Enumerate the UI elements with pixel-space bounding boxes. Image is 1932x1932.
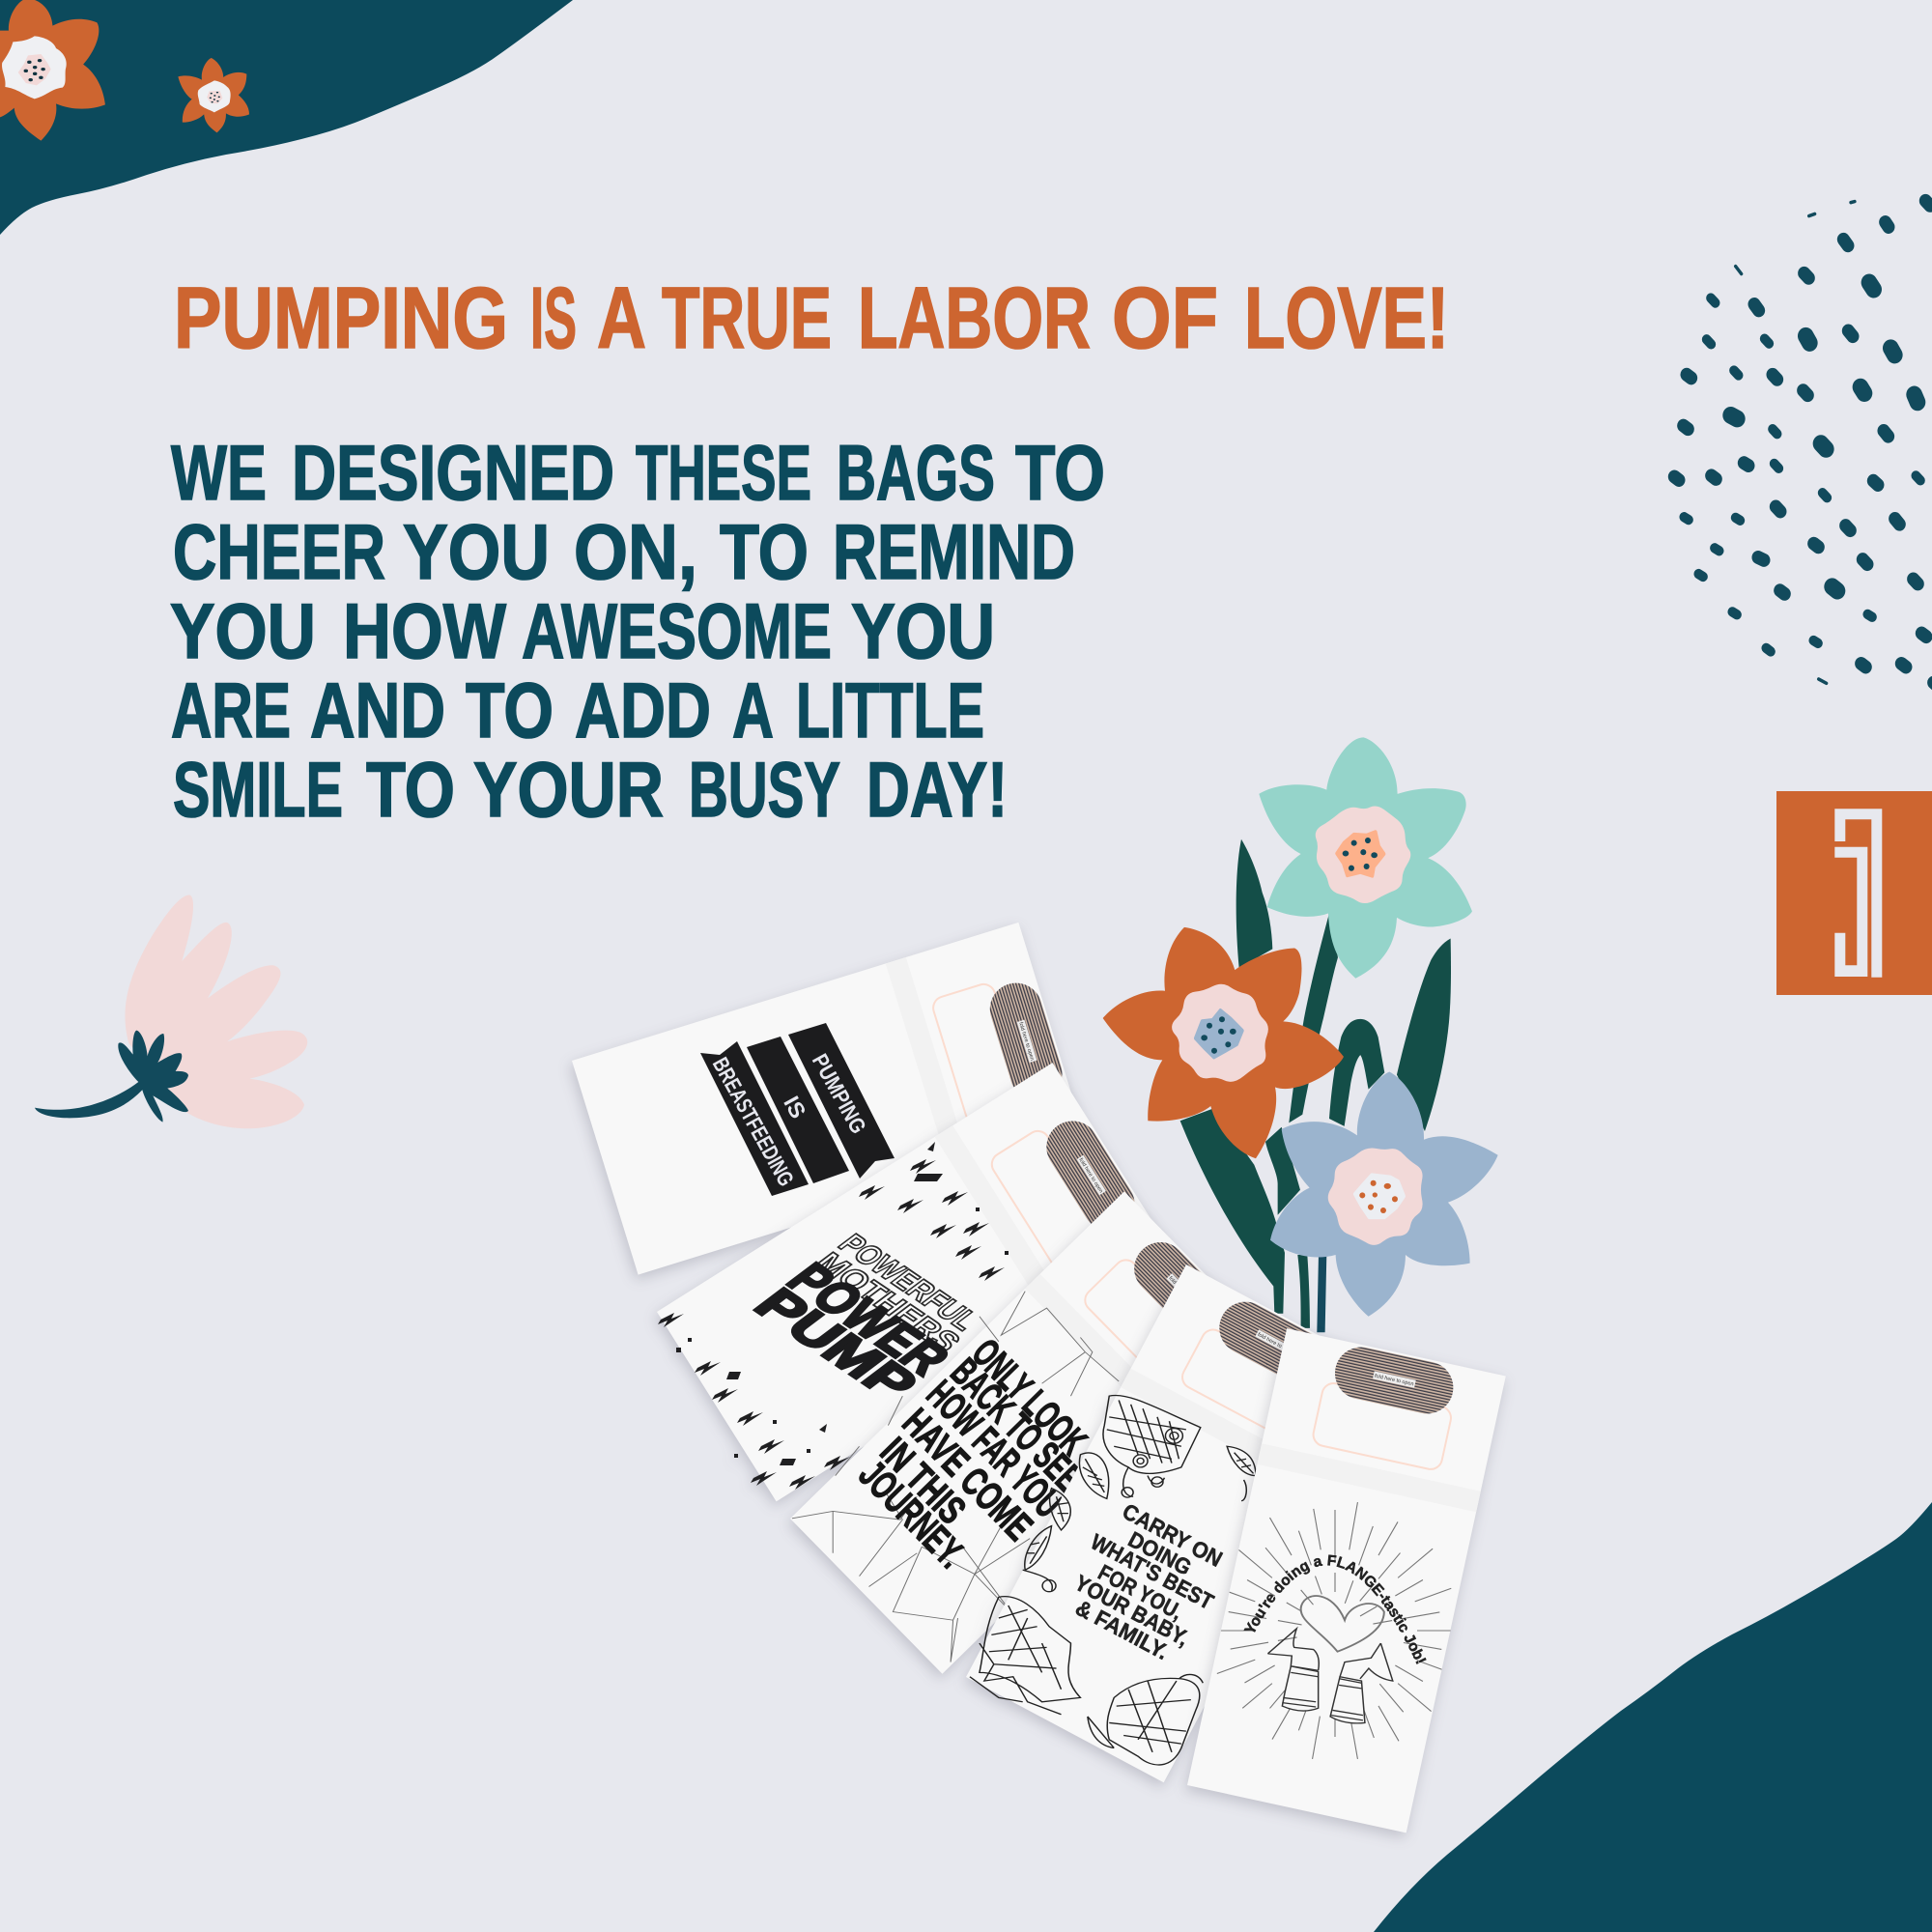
text block: we designed these bags: DESIGNED (292, 430, 614, 517)
bottom-right navy corner shape (1374, 1502, 1932, 1932)
text block: we designed these bags: YOU (170, 588, 316, 675)
slogan: POWERFUL (831, 1228, 987, 1336)
banner text: PUMPING (808, 1049, 871, 1138)
icon: blue flower (1270, 1071, 1498, 1317)
banner text: BREASTFEEDING (708, 1053, 799, 1190)
slogan: FOR YOU, (1094, 1559, 1187, 1625)
bag body: fold here to open (1077, 1157, 1104, 1194)
slogan: HAVE COME (895, 1400, 1041, 1548)
banner text (708, 1049, 871, 1190)
text block: we designed these bags: TO (1015, 430, 1105, 517)
bag body: fold here to open (1374, 1374, 1414, 1387)
bag 5: flange-tastic job: You're doing a FLANGE-tastic Job! (1243, 1554, 1427, 1664)
text block: we designed these bags: THESE (636, 430, 811, 517)
text block: we designed these bags: WE (171, 430, 267, 517)
heading: pumping is a true labor of love: A (597, 270, 646, 367)
text block: we designed these bags: LITTLE (796, 668, 984, 754)
heading: pumping is a true labor of love: LOVE! (1244, 270, 1449, 367)
text block: we designed these bags: ARE (171, 668, 291, 754)
slogan: ONLY LOOK (964, 1330, 1095, 1463)
text block: we designed these bags: REMIND (833, 509, 1075, 596)
slogan: & FAMILY. (1071, 1595, 1173, 1664)
heading: pumping is a true labor of love: LABOR (858, 270, 1091, 367)
text block: we designed these bags: YOU (403, 509, 550, 596)
text block: we designed these bags: ON, (574, 509, 697, 596)
heading: pumping is a true labor of love: IS (530, 270, 577, 367)
bag body: fold here to open (1167, 1275, 1199, 1307)
dotted circle pattern (1674, 201, 1932, 685)
text block: we designed these bags: A (732, 668, 774, 754)
heart and breast pumps (1267, 1596, 1393, 1723)
bag 2: powerful mothers power pump (657, 1063, 1172, 1501)
text block: we designed these bags (170, 430, 1105, 834)
geometric line art (792, 1292, 1119, 1662)
icon: small orange flower (178, 58, 249, 132)
text block: we designed these bags: BUSY (689, 747, 840, 834)
black banners (700, 1023, 895, 1196)
text block: we designed these bags: YOU (851, 588, 995, 675)
stems and leaves (1180, 839, 1451, 1332)
bag body: fold here to open (1017, 1021, 1035, 1062)
heading: pumping is a true labor of love: OF (1112, 270, 1218, 367)
bag body (657, 1063, 1172, 1501)
text block: we designed these bags: AND (310, 668, 445, 754)
text block: we designed these bags: BAGS (837, 430, 995, 517)
text block: we designed these bags: TO (366, 747, 455, 834)
text block: we designed these bags: TO (466, 668, 554, 754)
floral line art (970, 1395, 1256, 1765)
text block: we designed these bags: DAY! (867, 747, 1008, 834)
bag 1: pumping is breastfeeding (572, 923, 1085, 1275)
slogan (851, 1330, 1095, 1577)
slogan (1070, 1498, 1227, 1664)
icon: large orange flower (0, 0, 105, 141)
icon: teal flower (1259, 737, 1472, 979)
heading: pumping is a true labor of love (174, 270, 1449, 367)
pink petals (125, 895, 307, 1128)
text block: we designed these bags: TO (720, 509, 809, 596)
slogan: WHAT'S BEST (1087, 1529, 1218, 1614)
bag 5: flange-tastic job (1182, 1328, 1507, 1840)
bag body (966, 1264, 1384, 1782)
heading: pumping is a true labor of love: TRUE (662, 270, 832, 367)
text block: we designed these bags: YOUR (473, 747, 664, 834)
slogan (742, 1228, 987, 1409)
slogan: JOURNEY. (851, 1452, 974, 1577)
icon: orange flowers on the corner shape (0, 0, 249, 141)
arched slogan (1252, 1565, 1420, 1671)
navy calyx and stem (35, 1031, 188, 1122)
bag body (790, 1191, 1276, 1674)
text block: we designed these bags: ADD (575, 668, 711, 754)
slogan: POWER (775, 1255, 961, 1384)
lightning doodles (658, 1142, 1009, 1490)
text block: we designed these bags: AWESOME (522, 588, 832, 675)
slogan: CARRY ON (1119, 1498, 1227, 1572)
slogan: MOTHERS (808, 1246, 969, 1357)
slogan: HOW FAR YOU (919, 1372, 1070, 1525)
icon: pink flower with navy calyx (35, 895, 307, 1128)
bag body: fold here to open (1257, 1332, 1294, 1356)
top-left navy corner shape (0, 0, 573, 235)
bag 3: only look back (790, 1191, 1276, 1674)
bag body (572, 923, 1085, 1275)
logo tab (1776, 791, 1932, 995)
illustration: three daffodils (1103, 737, 1498, 1332)
text block: we designed these bags: SMILE (173, 747, 343, 834)
slogan: PUMP (742, 1280, 929, 1409)
slogan: YOUR BABY, (1070, 1570, 1193, 1651)
slogan: DOING (1124, 1526, 1196, 1580)
text block: we designed these bags: CHEER (173, 509, 385, 596)
slogan: IN THIS (872, 1429, 975, 1532)
sunburst rays (1214, 1502, 1451, 1759)
banner text: IS (779, 1092, 811, 1122)
icon: orange flower (1103, 927, 1344, 1158)
heading: pumping is a true labor of love: PUMPING (174, 270, 508, 367)
bag body (1187, 1328, 1506, 1833)
slogan: BACK TO SEE (943, 1350, 1091, 1499)
bag 4: carry on doing (966, 1264, 1384, 1782)
text block: we designed these bags: HOW (343, 588, 506, 675)
